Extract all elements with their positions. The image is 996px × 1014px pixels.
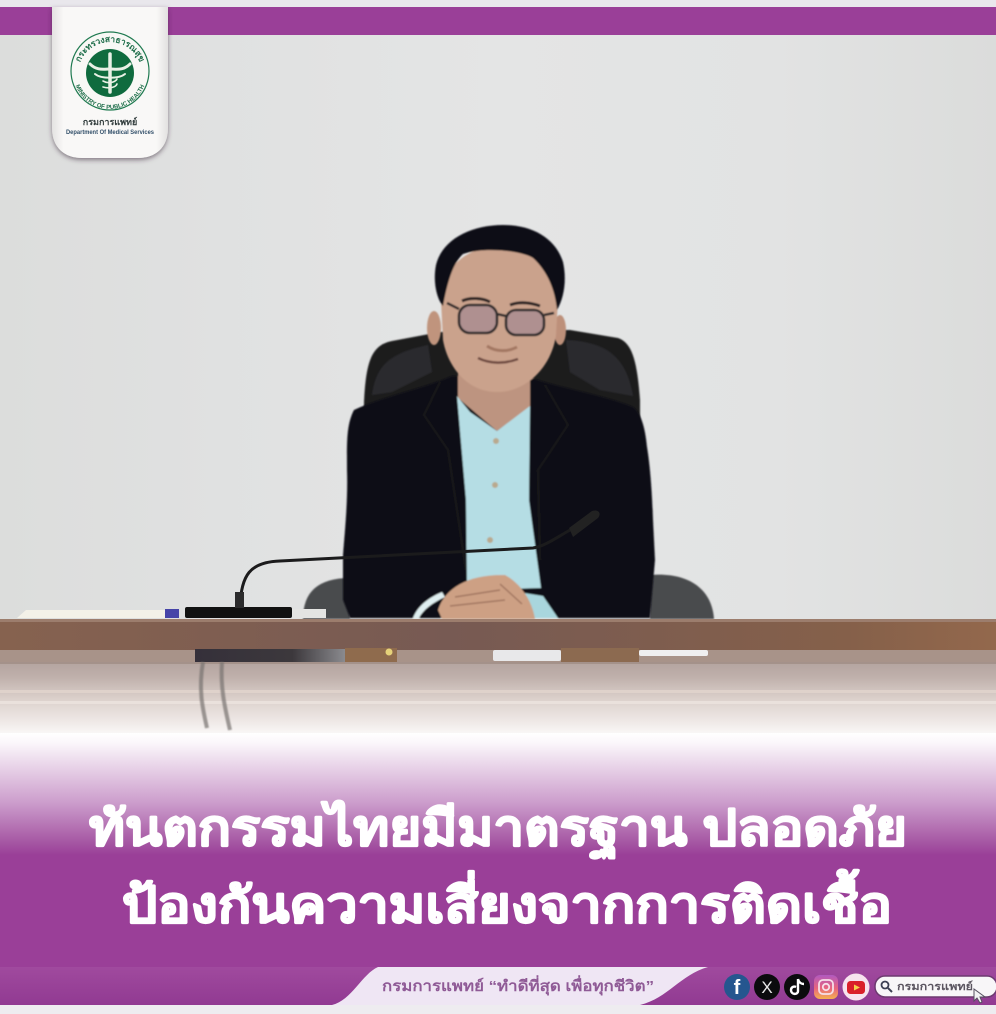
search box: กรมการแพทย์: [897, 980, 973, 993]
seal lettering: กระทรวงสาธารณสุข: [76, 36, 144, 62]
icon: cursor: [974, 989, 985, 1003]
ministry seal: [70, 31, 150, 111]
slogan ribbon: กรมการแพทย์ “ทำดีที่สุด เพื่อทุกชีวิต”: [382, 975, 654, 996]
ears: [427, 311, 441, 345]
neck: [458, 362, 530, 431]
photo: meeting room: [0, 35, 996, 740]
ministry seal: MINISTRY OF PUBLIC HEALTH: [76, 84, 144, 109]
lapel lines: [424, 382, 568, 570]
icon: X: X: [761, 978, 773, 997]
person: [343, 225, 655, 619]
wall: [0, 35, 996, 625]
cuffs: [413, 592, 445, 618]
title: ป้องกันความเสี่ยงจากการติดเชื้อ: [122, 869, 892, 933]
department name: กรมการแพทย์: [83, 116, 137, 127]
bottom purple panel: [0, 733, 996, 967]
brows: [462, 298, 540, 306]
microphone arm: [240, 530, 570, 607]
nose and mouth: [487, 346, 517, 351]
desk: [0, 619, 996, 740]
title: ทันตกรรมไทยมีมาตรฐาน ปลอดภัย: [89, 799, 907, 860]
logo card: Department Of Medical Services: [66, 129, 155, 136]
desk fittings: [195, 649, 345, 662]
footer bar: [0, 967, 996, 1005]
chair back: [364, 330, 640, 440]
microphone base: [185, 607, 292, 618]
icon: tiktok: [784, 974, 810, 1000]
logo card: [48, 6, 172, 164]
top strip: [0, 0, 996, 35]
search box: [875, 976, 996, 1003]
shirt buttons: [487, 438, 499, 543]
icon: instagram: [814, 975, 838, 999]
icon: facebook: f: [734, 977, 741, 999]
hair: [435, 225, 565, 310]
icon: X: [754, 974, 780, 1000]
shirt: [457, 396, 541, 590]
jacket: [343, 376, 655, 618]
hands: [438, 575, 535, 619]
caduceus emblem: [90, 54, 130, 92]
face: [441, 246, 558, 392]
title: [89, 799, 907, 933]
cables: [201, 662, 230, 730]
papers: [17, 610, 168, 618]
icon: facebook: [724, 974, 750, 1000]
desk items: [17, 510, 600, 618]
glasses: [447, 303, 554, 335]
chair arms: [303, 575, 714, 619]
slogan ribbon: [332, 967, 708, 1005]
icon: youtube: [842, 974, 870, 1000]
